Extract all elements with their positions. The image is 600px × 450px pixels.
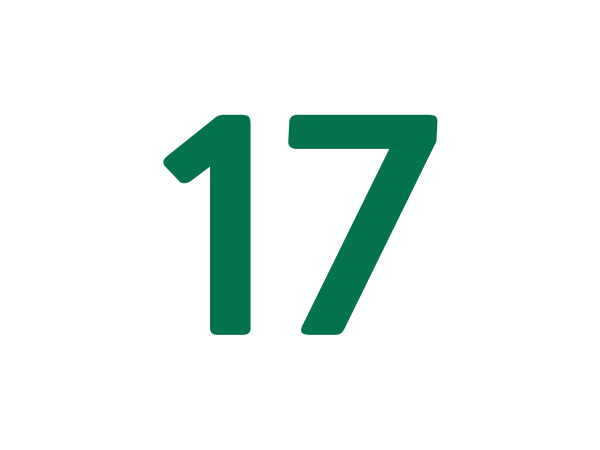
title: number 17	[124, 93, 459, 374]
title: number 17: 7	[259, 93, 459, 374]
title: number 17: 1	[124, 95, 322, 374]
